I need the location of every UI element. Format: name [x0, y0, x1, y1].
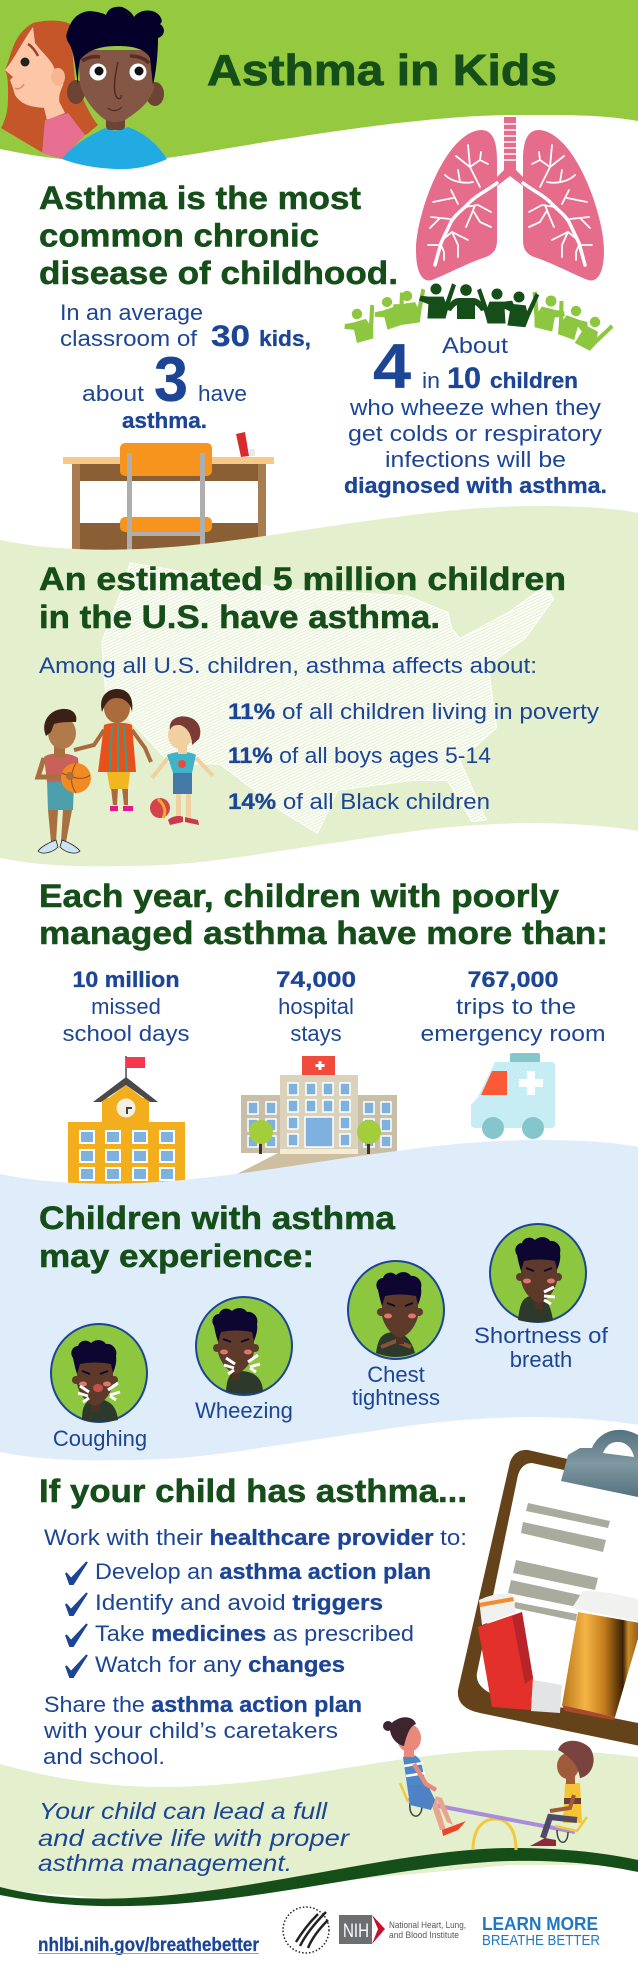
top banner wave [0, 0, 638, 162]
heading: 5 million children: An estimated 5 million children [39, 561, 566, 597]
heading: each year: managed asthma have more than: [39, 915, 608, 951]
illustration: hospital building [235, 1056, 397, 1175]
symptom: wheezing: Wheezing [195, 1398, 293, 1423]
illustration: two kids in banner [1, 7, 167, 169]
symptom: wheezing [195, 1297, 293, 1423]
text: classroom statistic: kids, [259, 326, 311, 351]
logo: HHS eagle [283, 1907, 329, 1953]
bottom light green wave [0, 1750, 638, 1900]
text: wheezing statistic: diagnosed with asthma. [344, 473, 607, 498]
stat: emergency room trips [420, 967, 606, 1046]
text: classroom statistic: 30 [211, 320, 250, 353]
text: percentages list: 11% of all children living in poverty [228, 699, 599, 724]
text: classroom statistic: asthma. [122, 408, 207, 433]
stat: emergency room trips: trips to the [456, 994, 576, 1019]
text: wheezing statistic: in [422, 368, 440, 393]
stat: missed school days: school days [62, 1021, 190, 1046]
text: classroom statistic: In an average [60, 300, 203, 325]
text: among all US children: Among all U.S. children, asthma affects about: [39, 653, 537, 678]
checklist: Take medicines as prescribed [95, 1621, 414, 1646]
heading: may experience [39, 1200, 395, 1274]
stat: missed school days: 10 million [72, 967, 180, 992]
heading: 5 million children: in the U.S. have asthma. [39, 599, 440, 635]
stat: emergency room trips: 767,000 [468, 967, 558, 992]
light green section wave [0, 506, 638, 866]
text: full and active life: and active life with proper [38, 1825, 351, 1851]
symptom: chest tightness: Chest [367, 1362, 425, 1387]
text: full and active life [38, 1798, 351, 1876]
text: work with healthcare provider: Work with their healthcare provider to: [44, 1525, 467, 1550]
text: classroom statistic: about [82, 381, 144, 406]
symptom: coughing: Coughing [53, 1426, 147, 1451]
heading: may experience: Children with asthma [39, 1200, 395, 1236]
text: classroom statistic: classroom of [60, 326, 198, 351]
title: Asthma in Kids [207, 46, 557, 95]
text: wheezing statistic [344, 332, 607, 498]
heading: most common chronic disease: disease of childhood. [39, 255, 398, 291]
checklist: Develop an asthma action plan [95, 1559, 431, 1584]
text: wheezing statistic: 4 [373, 332, 411, 402]
heading: most common chronic disease: common chronic [39, 218, 319, 254]
symptom: chest tightness [348, 1261, 444, 1410]
text: full and active life: Your child can lead a full [39, 1798, 328, 1824]
text: share the plan: with your child’s caretakers [43, 1718, 338, 1743]
light blue section wave [0, 1140, 638, 1460]
link: website url: nhlbi.nih.gov/breathebetter [38, 1935, 260, 1956]
illustration: ambulance [471, 1053, 555, 1139]
logo: NIH [339, 1915, 466, 1944]
illustration: classroom desk and chair [63, 432, 274, 552]
stat: hospital stays: 74,000 [276, 967, 356, 992]
text: wheezing statistic: 10 [447, 362, 481, 395]
text: percentages list [228, 699, 599, 814]
logo: Learn More Breathe Better [482, 1914, 600, 1949]
symptom: chest tightness: tightness [352, 1385, 440, 1410]
heading: each year: Each year, children with poorly [39, 878, 559, 914]
logo: Learn More Breathe Better: BREATHE BETTER [482, 1932, 600, 1949]
heading: may experience: may experience: [39, 1238, 314, 1274]
text: share the plan [43, 1692, 362, 1769]
text: full and active life: asthma management. [38, 1850, 292, 1876]
logo: NIH: and Blood Institute [389, 1930, 459, 1941]
illustration: three children playing [38, 689, 213, 853]
text: wheezing statistic: infections will be [385, 447, 566, 472]
symptom: shortness of breath: breath [510, 1347, 572, 1372]
text: percentages list: 11% of all boys ages 5-14 [228, 743, 491, 768]
symptom: coughing [51, 1324, 147, 1451]
text: wheezing statistic: children [490, 368, 578, 393]
text: share the plan: and school. [43, 1744, 165, 1769]
illustration: hatched US map [102, 563, 554, 833]
illustration: lungs [416, 117, 604, 280]
stat: hospital stays: hospital [278, 994, 354, 1019]
bottom dark green band [0, 1848, 638, 1906]
text: wheezing statistic: who wheeze when they [349, 395, 601, 420]
text: wheezing statistic: About [442, 333, 508, 358]
stat: missed school days [62, 967, 190, 1046]
text: classroom statistic: 3 [154, 345, 188, 415]
stat: hospital stays: stays [290, 1021, 342, 1046]
heading: each year [39, 878, 608, 951]
stat: emergency room trips: emergency room [420, 1021, 606, 1046]
logo: NIH: NIH [343, 1921, 369, 1942]
text: share the plan: Share the asthma action plan [44, 1692, 362, 1717]
illustration: children on seesaw [383, 1717, 594, 1850]
heading: most common chronic disease [39, 180, 398, 291]
stat: hospital stays [276, 967, 356, 1046]
text: classroom statistic [60, 300, 311, 433]
checklist [66, 1559, 431, 1677]
text: classroom statistic: have [198, 381, 247, 406]
illustration: school building [68, 1056, 185, 1184]
illustration: row of ten children [340, 283, 614, 356]
text: wheezing statistic: get colds or respiratory [348, 421, 602, 446]
checklist: Identify and avoid triggers [95, 1590, 383, 1615]
heading: 5 million children [39, 561, 566, 635]
stat: missed school days: missed [91, 994, 161, 1019]
logo: Learn More Breathe Better: LEARN MORE [482, 1914, 598, 1934]
text: percentages list: 14% of all Black children [228, 789, 490, 814]
checklist: Watch for any changes [95, 1652, 345, 1677]
symptom: shortness of breath: Shortness of [474, 1323, 609, 1348]
symptom: shortness of breath [474, 1224, 609, 1372]
illustration: clipboard with inhaler and pill bottle [458, 1430, 638, 1750]
logo: NIH: National Heart, Lung, [389, 1920, 466, 1931]
heading: if your child has asthma: If your child has asthma... [39, 1473, 467, 1509]
heading: most common chronic disease: Asthma is the most [39, 180, 361, 216]
